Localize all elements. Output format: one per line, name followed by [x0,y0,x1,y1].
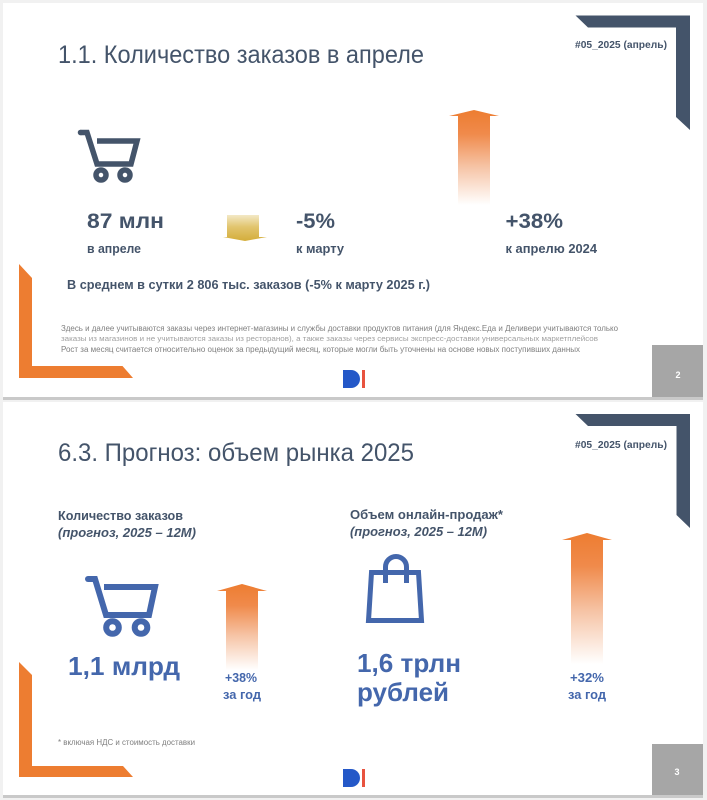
stat: online sales forecast value: рублей [357,677,449,707]
stat: monthly orders: в апреле [87,242,141,256]
logo [343,370,365,388]
corner bracket: navy [576,16,690,130]
footnote: Здесь и далее учитываются заказы через интернет-магазины и службы доставки продуктов питания (для Яндекс.Еда и Деливери учитываются только [61,324,619,333]
icon: shopping bag [368,556,422,620]
stat: change to March: -5% [296,210,335,233]
stat: sales growth [568,671,606,702]
stat: sales growth: за год [568,688,606,702]
stat: online sales forecast value [357,648,461,707]
arrow: year-on-year growth [449,110,499,205]
issue tag: #05_2025 (апрель) [575,440,667,451]
footnote: Рост за месяц считается относительно оценок за предыдущий месяц, которые могли быть уточнены на основе новых поступивших данных [61,345,580,354]
heading: order count forecast: Количество заказов [58,509,183,523]
stat: change to March [296,210,344,256]
page number box [652,744,703,795]
heading: order count forecast: (прогноз, 2025 – 12М) [58,526,196,540]
footnote [61,324,619,354]
arrow: sales growth [562,533,612,664]
corner bracket: navy [576,414,690,528]
stat: change to April 2024 [506,210,597,256]
title: orders in April: 1.1. Количество заказов в апреле [58,41,424,69]
stat: orders forecast value: 1,1 млрд [68,651,180,681]
heading: online sales forecast: (прогноз, 2025 – 12М) [350,525,487,539]
daily average callout: В среднем в сутки 2 806 тыс. заказов (-5% к марту 2025 г.) [67,278,430,292]
title: market forecast: 6.3. Прогноз: объем рынка 2025 [58,439,414,467]
heading: online sales forecast [350,508,503,539]
stat: orders growth [223,671,261,702]
page number box [652,345,703,397]
issue tag: #05_2025 (апрель) [575,40,667,51]
heading: online sales forecast: Объем онлайн-продаж* [350,508,503,522]
stat: orders growth: +38% [225,671,257,685]
heading: order count forecast [58,509,196,540]
stat: monthly orders [87,210,164,256]
stat: change to April 2024: +38% [506,210,563,233]
corner bracket: orange [19,264,133,378]
stat: sales growth: +32% [570,671,604,685]
arrow: month-on-month decline [223,215,267,241]
page number box: 2 [675,370,681,380]
stat: orders growth: за год [223,688,261,702]
panel: slide 3, market forecast [3,402,703,798]
stat: online sales forecast value: 1,6 трлн [357,648,461,678]
page number box: 3 [674,767,680,777]
footnote: заказы из магазинов и не учитываются заказы из ресторанов), а также заказы через сервисы экспресс-доставки универсальных маркетплейсов [61,334,598,343]
stat: change to March: к марту [296,242,344,256]
panel: slide 2, orders in April [3,3,703,400]
icon: shopping cart [85,576,155,634]
footnote: * включая НДС и стоимость доставки [58,738,195,747]
stat: change to April 2024: к апрелю 2024 [506,242,597,256]
arrow: orders growth [217,584,267,670]
stat: monthly orders: 87 млн [87,210,164,233]
logo [343,769,365,787]
corner bracket: orange [19,662,133,777]
icon: shopping cart [78,130,137,180]
